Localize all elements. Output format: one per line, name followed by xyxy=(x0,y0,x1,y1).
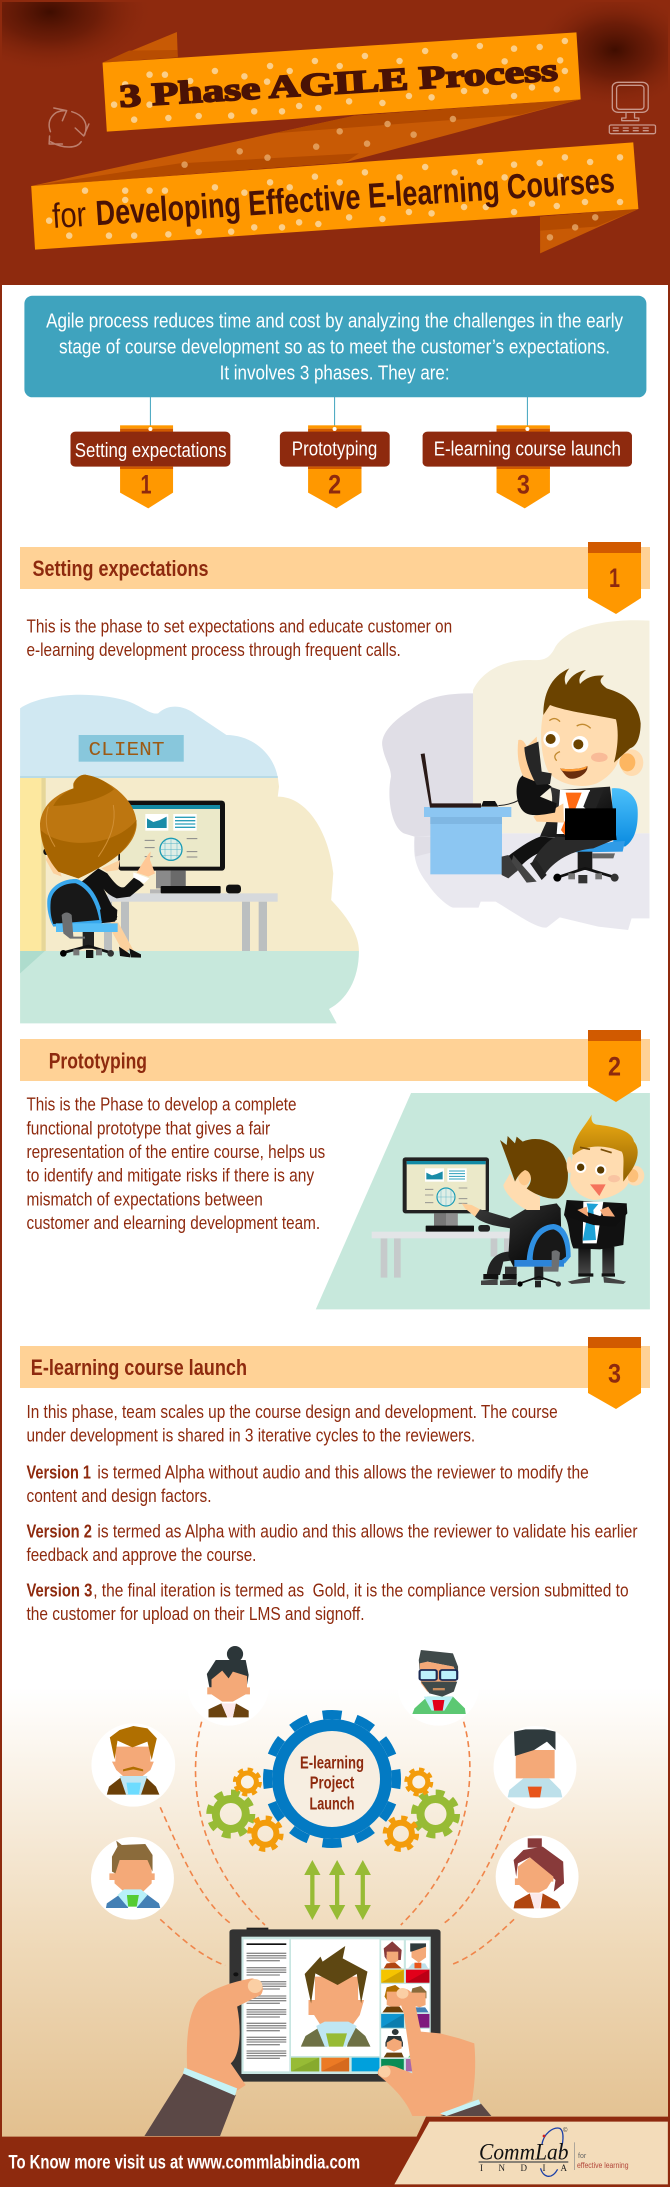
logo: commlab india xyxy=(479,2127,628,2176)
illustration: team member on phone xyxy=(382,620,649,930)
section heading: setting expectations: Setting expectations xyxy=(32,556,208,581)
small gears xyxy=(210,1770,456,1849)
title xyxy=(51,51,616,236)
tablet xyxy=(229,1928,441,2082)
woman xyxy=(40,775,155,958)
section heading: setting expectations xyxy=(20,542,650,614)
chair xyxy=(514,1224,571,1287)
gear: green right xyxy=(414,1793,456,1835)
phase tag 1 xyxy=(71,397,230,508)
office chair xyxy=(553,788,638,883)
section heading: prototyping: Prototyping xyxy=(49,1048,147,1073)
desk xyxy=(372,1232,512,1278)
gear: e-learning project launch xyxy=(268,1714,396,1844)
illustration: two colleagues at a monitor xyxy=(372,1115,644,1287)
text: version 1: content and design factors. xyxy=(26,1485,212,1506)
text: version 2: feedback and approve the course. xyxy=(26,1544,256,1565)
phase tag 3: 3 xyxy=(517,470,530,500)
illustration: client at desk xyxy=(20,695,359,1023)
section heading: e-learning course launch xyxy=(20,1337,650,1409)
logo: commlab india: CommLab xyxy=(479,2139,568,2164)
section heading: e-learning course launch: E-learning course launch xyxy=(31,1355,247,1380)
text: launch intro xyxy=(26,1401,558,1446)
avatar: man with dark hair xyxy=(494,1726,576,1809)
text: version 3: the customer for upload on their LMS and signoff. xyxy=(26,1603,364,1624)
main portrait xyxy=(301,1946,370,2047)
number badge 2 xyxy=(588,1030,641,1102)
text: prototyping body: customer and elearning development team. xyxy=(26,1212,320,1233)
text: setting expectations body: This is the phase to set expectations and educate customer on xyxy=(26,615,452,636)
arrows: two-way xyxy=(304,1860,371,1920)
text: version 1: Version 1 xyxy=(26,1461,91,1482)
section heading: setting expectations: 1 xyxy=(609,563,620,593)
man head xyxy=(518,668,643,786)
gear: orange lower right xyxy=(385,1818,416,1849)
text: version 1: is termed Alpha without audio and this allows the reviewer to modify the xyxy=(97,1461,589,1482)
avatar: man with green tie xyxy=(91,1837,174,1920)
section heading: e-learning course launch: 3 xyxy=(608,1359,621,1389)
gear: e-learning project launch: Launch xyxy=(310,1794,354,1814)
phase tag 2: Prototyping xyxy=(292,439,377,461)
avatar: woman with red hair xyxy=(496,1835,579,1918)
phase tag 1: Setting expectations xyxy=(75,440,226,462)
phase tag 3 xyxy=(423,397,632,508)
text: prototyping body: representation of the entire course, helps us xyxy=(26,1141,325,1162)
gear: orange upper right xyxy=(407,1770,431,1794)
illustration panel: prototyping background xyxy=(316,1093,650,1309)
text: version 3: Version 3 xyxy=(26,1579,92,1600)
phase tag 3: E-learning course launch xyxy=(434,439,621,461)
text: version 3 xyxy=(26,1579,629,1624)
text: launch intro: under development is shared in 3 iterative cycles to the reviewers. xyxy=(26,1425,475,1446)
gear: green left xyxy=(210,1793,252,1835)
gear: e-learning project launch: Project xyxy=(310,1773,354,1793)
text: prototyping body: to identify and mitigate risks if there is any xyxy=(26,1165,315,1186)
text: setting expectations body xyxy=(26,615,452,660)
gear: orange lower left xyxy=(250,1818,281,1849)
avatar: man with moustache xyxy=(91,1723,175,1807)
avatar: bearded man with glasses xyxy=(397,1644,479,1726)
monitor xyxy=(118,801,241,893)
seated man xyxy=(462,1136,568,1285)
text: setting expectations body: e-learning development process through frequent calls. xyxy=(26,639,401,660)
text: version 2: Version 2 xyxy=(26,1520,92,1541)
panel: intro: It involves 3 phases. They are: xyxy=(220,362,450,384)
logo: commlab india: © xyxy=(563,2127,568,2134)
gear: orange upper left xyxy=(235,1770,259,1794)
laptop and phone base xyxy=(421,753,519,808)
phase tag 2: 2 xyxy=(328,470,341,500)
text: version 2 xyxy=(26,1520,638,1565)
text: prototyping body: This is the Phase to develop a complete xyxy=(26,1094,296,1115)
avatar: woman with bun xyxy=(187,1644,269,1726)
panel: intro xyxy=(24,296,646,397)
standing man xyxy=(564,1115,644,1284)
dashed connectors xyxy=(160,1722,514,1965)
hands holding tablet xyxy=(144,1978,491,2136)
footer bar: To Know more visit us at www.commlabindia.com xyxy=(8,2152,360,2173)
title: for xyxy=(51,195,88,236)
phase tag 1: 1 xyxy=(140,470,152,500)
number badge 2: 2 xyxy=(608,1052,621,1082)
logo: commlab india: for xyxy=(578,2153,587,2160)
text: prototyping body: functional prototype that gives a fair xyxy=(26,1117,270,1138)
text: version 1 xyxy=(26,1461,589,1506)
gear: e-learning project launch: E-learning xyxy=(300,1752,364,1772)
desk xyxy=(104,893,278,951)
text: launch intro: In this phase, team scales up the course design and development. The course xyxy=(26,1401,558,1422)
icon: cycle arrows xyxy=(49,108,89,147)
title: 3 Phase AGILE Process xyxy=(118,51,559,114)
chair xyxy=(47,879,118,958)
footer bar xyxy=(0,2117,670,2187)
icon: desktop computer xyxy=(609,82,655,134)
man body xyxy=(502,775,617,883)
label: client sign: CLIENT xyxy=(88,739,164,761)
desk xyxy=(424,807,511,874)
background gradient for launch scene xyxy=(2,1650,668,2187)
phase tag 2 xyxy=(280,397,390,508)
text: prototyping body: mismatch of expectations between xyxy=(26,1188,263,1209)
thumbnails xyxy=(233,1940,429,2071)
monitor xyxy=(403,1157,490,1232)
header banner xyxy=(0,0,670,285)
logo: commlab india: effective learning xyxy=(577,2161,628,2170)
section heading: prototyping xyxy=(20,1039,650,1081)
logo: commlab india: I N D I A xyxy=(480,2163,568,2173)
text: prototyping body xyxy=(26,1094,325,1233)
